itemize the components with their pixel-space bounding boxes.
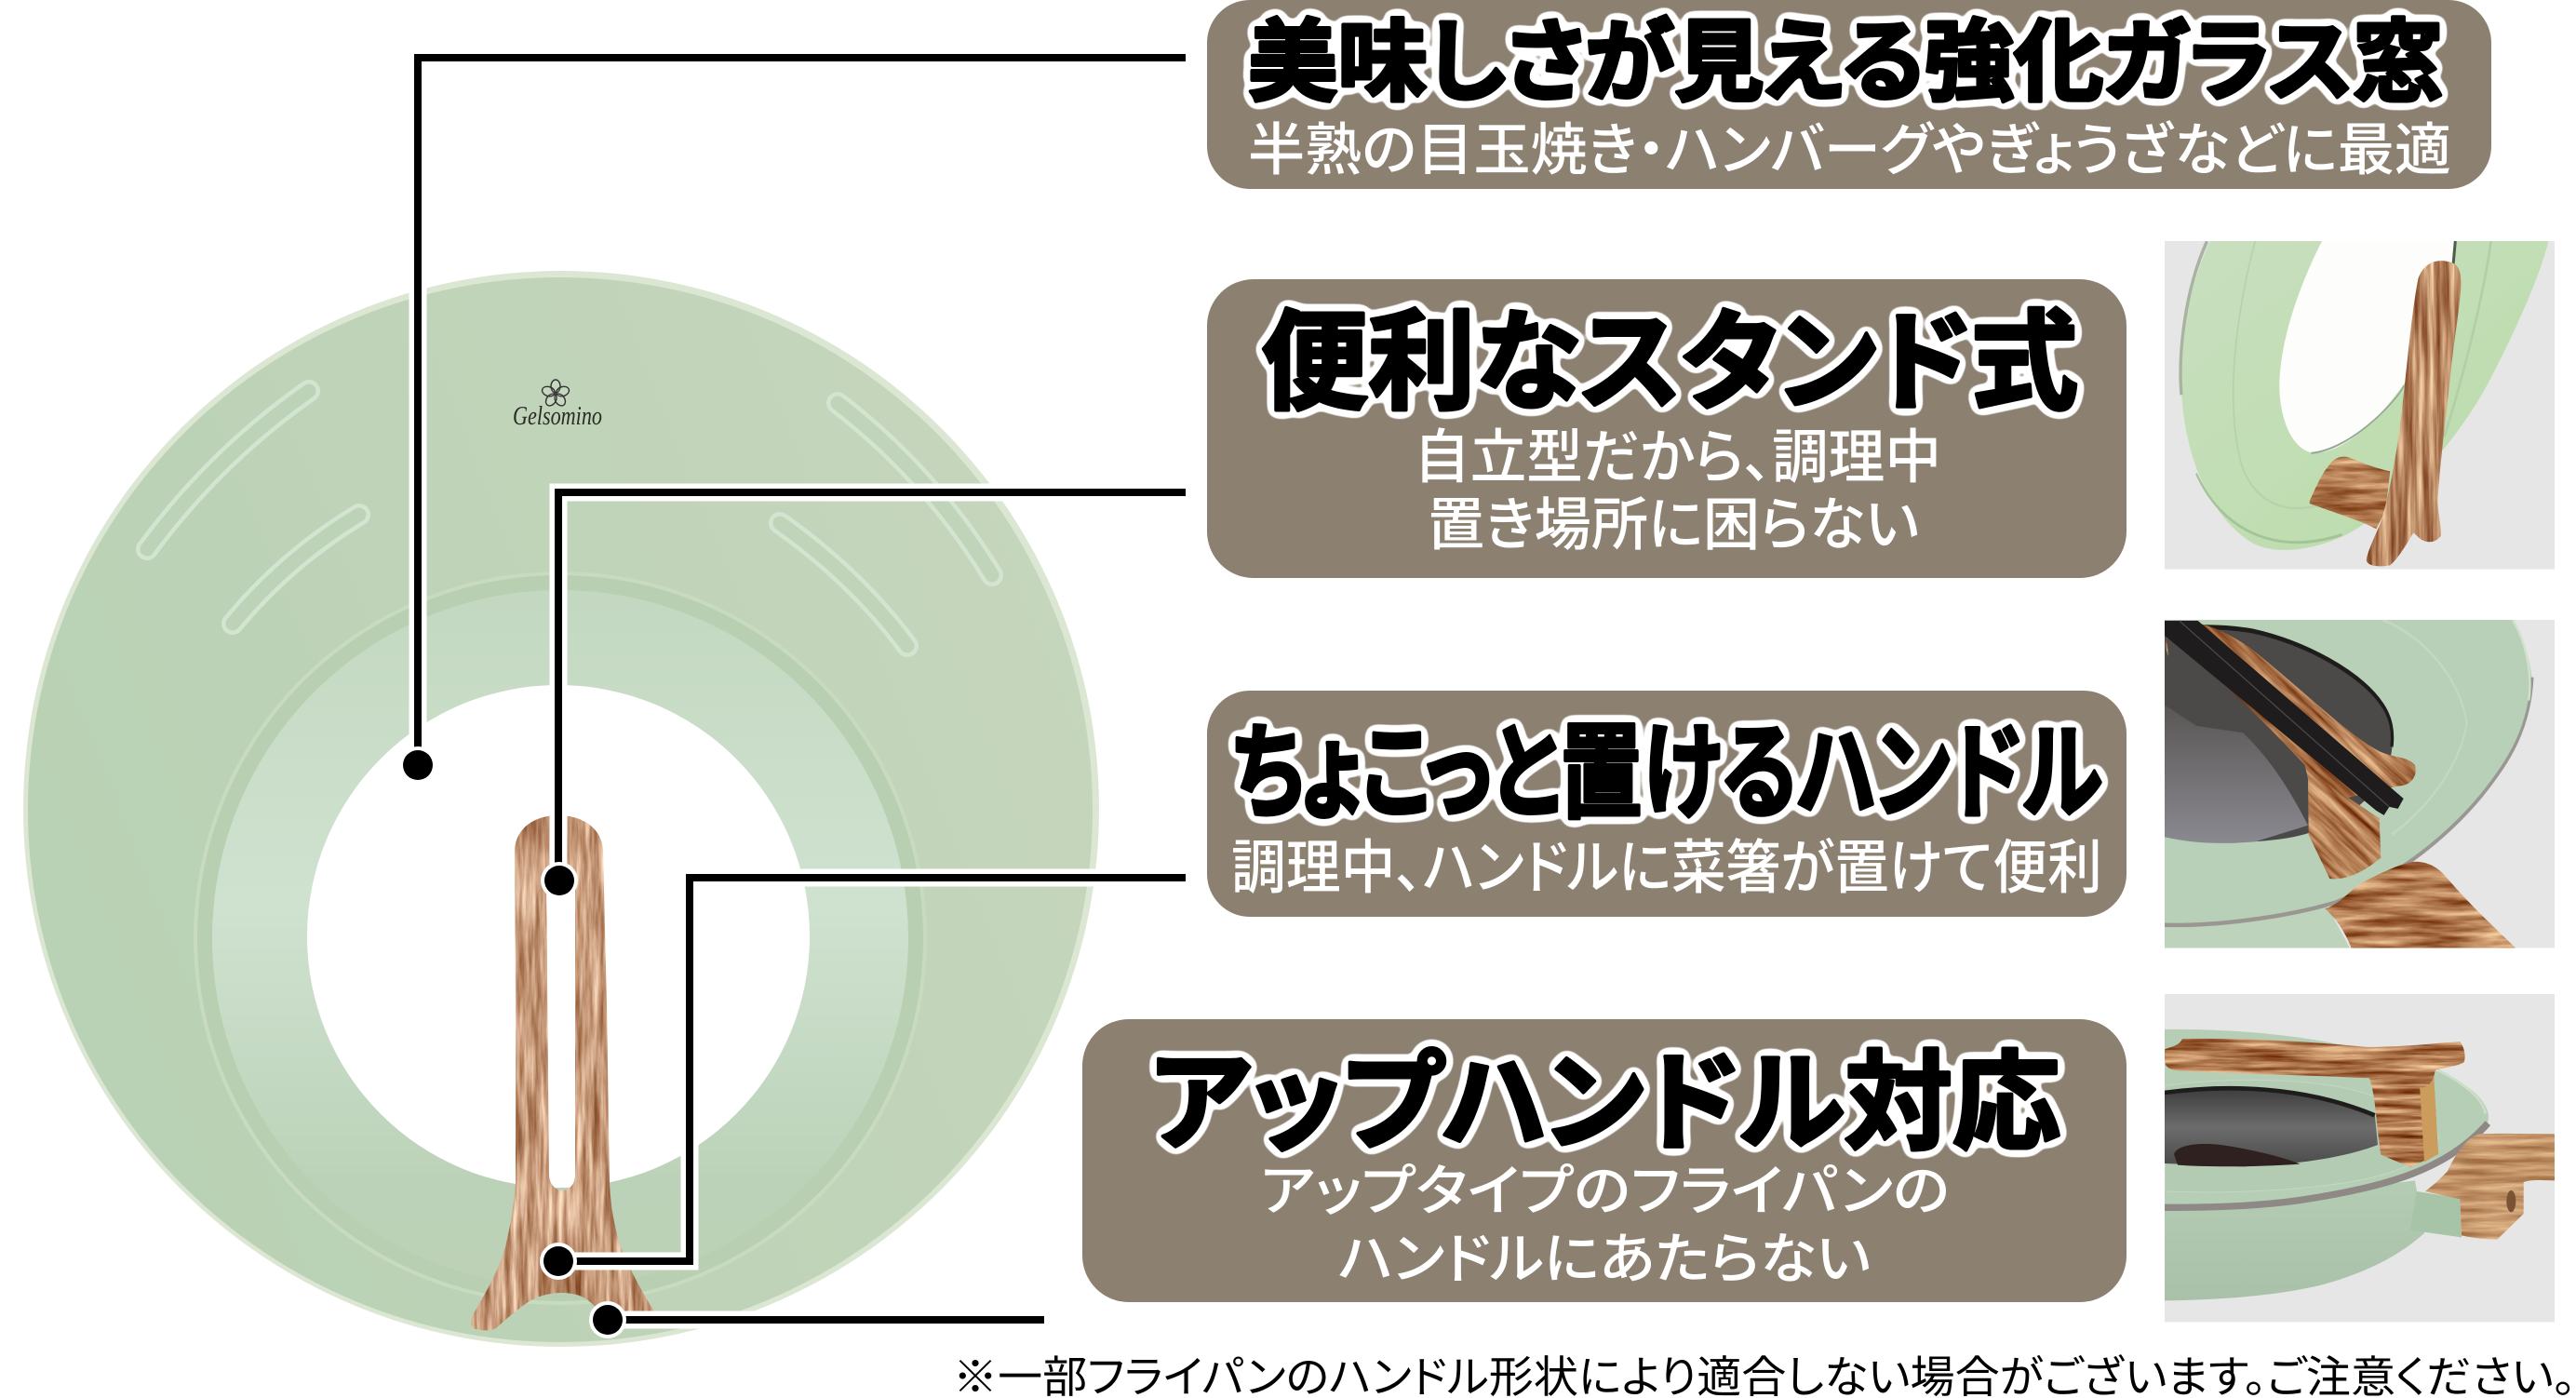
inner raised ring	[194, 571, 927, 1305]
leader line: up handle	[589, 1301, 1044, 1338]
inner ring surface	[212, 590, 908, 1286]
heading: 便利なスタンド式	[1261, 302, 2078, 423]
glass window opening	[307, 685, 810, 1188]
description	[1260, 1161, 1950, 1290]
logo: Gelsomino	[513, 380, 602, 431]
photo: lid standing on its stand	[2165, 241, 2555, 571]
description: 置き場所に困らない	[1428, 493, 1919, 558]
panel background	[1082, 1019, 2127, 1302]
description: ハンドルにあたらない	[1338, 1229, 1871, 1290]
heading: 美味しさが見える強化ガラス窓	[1248, 13, 2443, 113]
heading: ちょこっと置けるハンドル	[1233, 715, 2102, 831]
panel: glass window	[1207, 0, 2491, 189]
wooden stand	[471, 815, 653, 1331]
leader line: stand	[541, 492, 1186, 899]
description	[1414, 425, 1941, 558]
description: アップタイプのフライパンの	[1260, 1161, 1950, 1222]
embossed slots	[147, 391, 992, 646]
photo: chopsticks resting on handle	[2165, 620, 2555, 948]
panel background	[1207, 0, 2491, 189]
lid flat surface	[28, 277, 1093, 1342]
lid outer rim	[23, 271, 1099, 1347]
panel: handle rest	[1207, 691, 2127, 917]
leader line: glass window	[399, 58, 1186, 784]
heading: アップハンドル対応	[1150, 1042, 2060, 1163]
panel background	[1207, 691, 2127, 917]
product: lid with wooden stand	[23, 271, 1099, 1347]
leader line: handle rest	[540, 878, 1186, 1280]
panel: stand	[1207, 279, 2127, 578]
photo: raised handle clearance	[2162, 994, 2556, 1323]
panel: up handle	[1082, 1019, 2127, 1302]
description: 半熟の目玉焼き・ハンバーグやぎょうざなどに最適	[1248, 118, 2451, 181]
description: 調理中、ハンドルに菜箸が置けて便利	[1231, 836, 2102, 901]
panel background	[1207, 279, 2127, 578]
logo: Gelsomino: Gelsomino	[513, 401, 602, 431]
description: 自立型だから、調理中	[1414, 425, 1941, 491]
